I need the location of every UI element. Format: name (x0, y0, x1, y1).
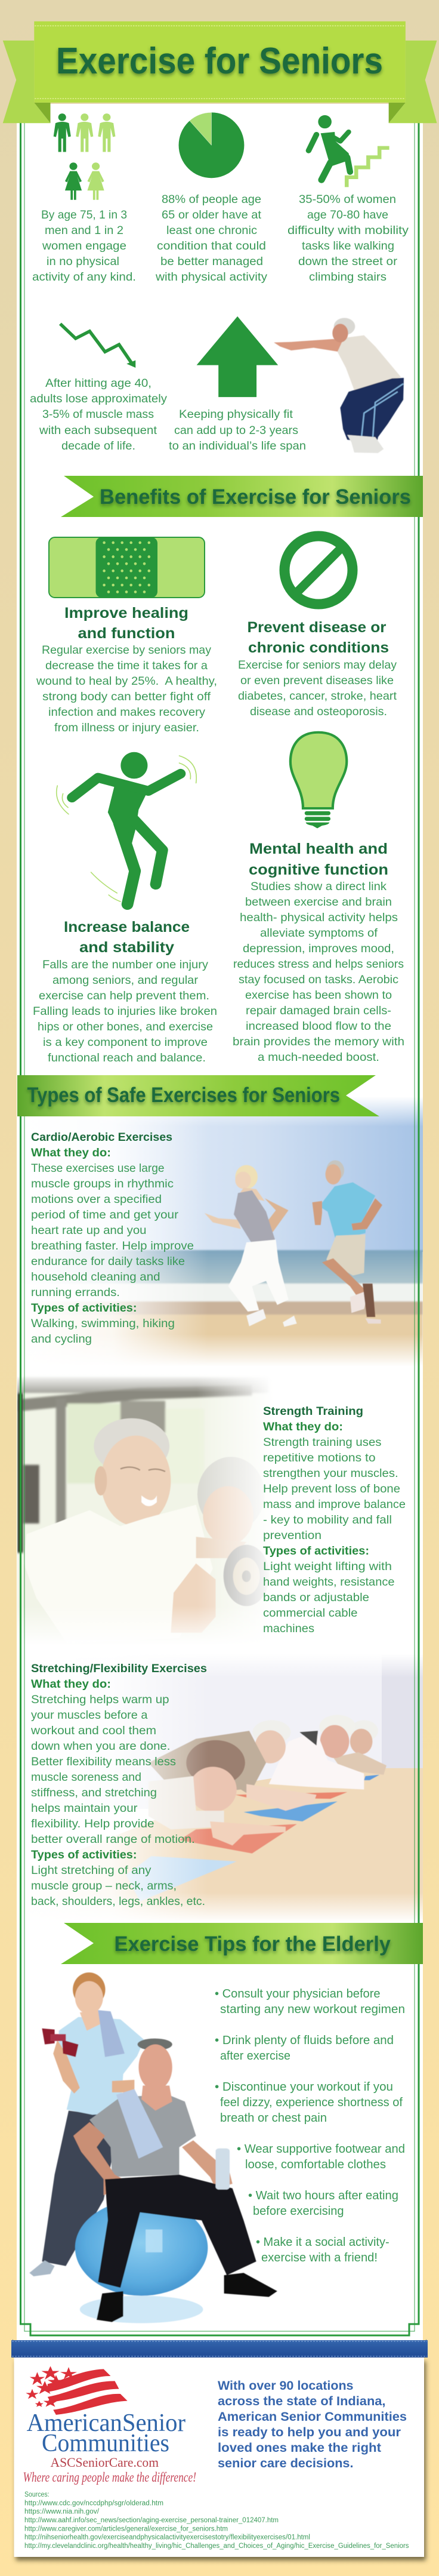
text: strength training: prevention (263, 1529, 321, 1542)
sources list: http://www.caregiver.com/articles/general/exercise_for_seniors.htm (24, 2525, 228, 2532)
benefit: mental health and cognitive function: increased blood flow to the (246, 1020, 391, 1033)
logo: American Senior Communities: ASCSeniorCare.com (50, 2455, 159, 2470)
person two (253, 1721, 290, 1740)
stat: inactivity by age 75: men and 1 in 2 (45, 224, 123, 237)
stat: muscle mass loss after 40: adults lose approximately (30, 392, 167, 405)
photo: senior couple with exercise ball (29, 1972, 277, 2323)
callout: 90 locations: loved ones make the right (218, 2441, 381, 2455)
text: cardio aerobic exercises: household cleaning and (31, 1270, 160, 1284)
exercise tips list: • Wait two hours after eating (248, 2189, 398, 2202)
sources list: Sources: (24, 2491, 50, 2498)
icon: prohibition sign (285, 536, 353, 604)
banner: benefits of exercise (61, 476, 423, 517)
text: stretching and flexibility: flexibility. Help provide (31, 1817, 154, 1830)
text: strength training: What they do: (263, 1420, 343, 1433)
icon: person climbing stairs (308, 115, 389, 187)
text: strength training: Help prevent loss of bone (263, 1482, 400, 1495)
text: cardio aerobic exercises: heart rate up and you (31, 1224, 147, 1237)
benefit: mental health and cognitive function: between exercise and brain (245, 895, 392, 909)
sources list (24, 2491, 409, 2550)
benefit: improve healing and function (36, 605, 217, 734)
text: strength training: bands or adjustable (263, 1591, 369, 1604)
exercise mats (179, 1824, 297, 1854)
text: cardio aerobic exercises: Walking, swimming, hiking (31, 1317, 175, 1330)
ribbon tails (3, 41, 437, 123)
title ribbon (3, 21, 437, 123)
callout: 90 locations: across the state of Indiana, (218, 2395, 385, 2408)
text: stretching and flexibility: stiffness, and stretching (31, 1786, 157, 1799)
benefit: improve healing and function: decrease the time it takes for a (45, 659, 208, 672)
icon: declining trend arrow (60, 324, 135, 368)
photo: older man squatting (274, 318, 404, 453)
stat: chronic conditions 88 percent: 88% of people age (162, 193, 261, 206)
benefit: increase balance and stability: is a key component to improve (43, 1036, 208, 1049)
benefit: improve healing and function: strong body can better fight off (42, 690, 211, 703)
text: strength training (263, 1405, 406, 1635)
photo: couple in the gym (17, 1374, 274, 1645)
exercise tips list: breath or chest pain (220, 2111, 327, 2125)
text: cardio aerobic exercises: running errands. (31, 1286, 120, 1299)
stat: mobility difficulty in women: age 70-80 have (307, 208, 388, 221)
sources list: https://www.nia.nih.gov/ (24, 2509, 100, 2516)
benefit: improve healing and function: infection and makes recovery (48, 706, 205, 719)
callout: 90 locations: is ready to help you and your (218, 2426, 401, 2439)
text: strength training: - key to mobility and fall (263, 1513, 392, 1526)
man jogger (312, 1160, 382, 1324)
icon: three men, one highlighted (54, 113, 115, 152)
benefit: increase balance and stability: Increase balance (64, 919, 190, 935)
photo: seniors stretching on mats (92, 1660, 423, 1919)
text: stretching and flexibility: your muscles before a (31, 1709, 148, 1722)
sources list: http://nihseniorhealth.gov/exerciseandphysicalactivityexercisestotry/flexibilityexercises/01.html (24, 2534, 310, 2541)
banner: exercise tips for the elderly (61, 1923, 423, 1964)
stat: chronic conditions 88 percent: be better managed (160, 255, 263, 268)
benefit: improve healing and function: wound to heal by 25%. A healthy, (36, 675, 217, 688)
benefit: mental health and cognitive function: health- physical activity helps (240, 911, 398, 924)
person four (350, 1720, 378, 1741)
benefit: increase balance and stability: among seniors, and regular (52, 974, 199, 987)
exercise tips list: • Consult your physician before (215, 1987, 381, 2001)
benefit: improve healing and function: from illness or injury easier. (54, 721, 199, 734)
callout: 90 locations: American Senior Communities (218, 2410, 407, 2424)
benefit: increase balance and stability: Falling leads to injuries like broken (33, 1005, 217, 1018)
benefit: mental health and cognitive function: depression, improves mood, (243, 942, 394, 955)
person one (186, 1740, 246, 1780)
banner: benefits of exercise: Benefits of Exercise for Seniors (100, 485, 411, 509)
stat: mobility difficulty in women: climbing stairs (309, 270, 387, 284)
text: strength training: commercial cable (263, 1606, 358, 1620)
older woman (197, 1457, 265, 1531)
stat: muscle mass loss after 40 (30, 377, 167, 453)
text: stretching and flexibility: Light stretching of any (31, 1864, 152, 1877)
person three (320, 1715, 354, 1736)
benefit: mental health and cognitive function: alleviate symptoms of (260, 927, 378, 940)
text: stretching and flexibility: better overall range of motion. (31, 1833, 195, 1846)
text: stretching and flexibility: helps maintain your (31, 1802, 138, 1815)
text: strength training: Strength Training (263, 1405, 363, 1418)
benefit: increase balance and stability: and stability (79, 939, 174, 956)
stat: chronic conditions 88 percent: condition that could (157, 239, 266, 253)
stat: chronic conditions 88 percent: 65 or older have at (162, 208, 262, 221)
text: stretching and flexibility: Better flexibility means less (31, 1755, 176, 1768)
stat: mobility difficulty in women: down the street or (298, 255, 398, 268)
sources list: http://www.aahf.info/sec_news/section/aging-exercise_personal-trainer_012407.htm (24, 2517, 279, 2524)
logo: American Senior Communities (23, 2366, 196, 2485)
benefit: prevent disease or chronic conditions (238, 619, 397, 718)
benefit: mental health and cognitive function: stay focused on tasks. Aerobic (239, 973, 398, 986)
exercise tips list: before exercising (253, 2204, 344, 2218)
text: stretching and flexibility: muscle group – neck, arms, (31, 1879, 177, 1892)
sources list: http://www.cdc.gov/nccdphp/sgr/olderad.htm (24, 2500, 163, 2507)
exercise tips list: starting any new workout regimen (220, 2002, 405, 2016)
logo: American Senior Communities: Communities (42, 2430, 169, 2457)
sources list: http://my.clevelandclinic.org/health/healthy_living/hic_Challenges_and_Choices_of_Aging/hic_Exercise_Guidelines_for_Seniors (24, 2543, 409, 2550)
title: Exercise for Seniors (56, 41, 383, 82)
text: cardio aerobic exercises: motions over a specified (31, 1193, 162, 1206)
text: strength training: Light weight lifting with (263, 1560, 392, 1573)
text: strength training: Types of activities: (263, 1544, 369, 1558)
logo wordmark: AmericanSenior (27, 2409, 186, 2437)
icon: light bulb (290, 733, 347, 828)
text: stretching and flexibility (30, 1662, 207, 1908)
standing woman (29, 1972, 144, 2276)
dumbbell (224, 1545, 270, 1606)
stat: added life span (169, 408, 306, 453)
footer card (11, 2339, 428, 2557)
text: strength training: repetitive motions to (263, 1451, 376, 1464)
benefit: prevent disease or chronic conditions: chronic conditions (248, 639, 389, 656)
benefit: improve healing and function: and function (78, 625, 175, 642)
text: cardio aerobic exercises: Cardio/Aerobic Exercises (31, 1131, 172, 1144)
stat: mobility difficulty in women (287, 193, 409, 284)
exercise tips list: loose, comfortable clothes (245, 2158, 386, 2171)
benefit: improve healing and function: Improve healing (64, 605, 188, 621)
exercise tips list: • Drink plenty of fluids before and (215, 2033, 394, 2047)
text: cardio aerobic exercises: breathing faster. Help improve (31, 1239, 194, 1252)
text: strength training: Strength training uses (263, 1436, 382, 1449)
benefit: increase balance and stability: hips or other bones, and exercise (38, 1020, 213, 1033)
benefit: mental health and cognitive function: a much-needed boost. (258, 1051, 379, 1064)
exercise tips list: • Discontinue your workout if you (215, 2080, 393, 2094)
stat: mobility difficulty in women: tasks like walking (302, 239, 394, 253)
stat: muscle mass loss after 40: with each subsequent (39, 424, 157, 437)
benefit: prevent disease or chronic conditions: Prevent disease or (247, 619, 387, 636)
icons row one (54, 112, 404, 453)
text: stretching and flexibility: Types of activities: (31, 1848, 137, 1861)
logo: American Senior Communities: Where caring people make the difference! (23, 2470, 196, 2485)
exercise tips list: • Make it a social activity- (256, 2235, 389, 2249)
ball reflection (80, 2296, 203, 2323)
benefit: improve healing and function: Regular exercise by seniors may (42, 644, 211, 657)
stat: mobility difficulty in women: difficulty with mobility (287, 224, 409, 237)
text: stretching and flexibility: workout and cool them (30, 1724, 156, 1737)
stat: muscle mass loss after 40: After hitting age 40, (45, 377, 152, 390)
icon: bandage (49, 537, 205, 598)
benefit: mental health and cognitive function: exercise has been shown to (245, 989, 392, 1002)
stat: mobility difficulty in women: 35-50% of women (299, 193, 396, 206)
text: stretching and flexibility: down when you are done. (31, 1740, 170, 1753)
text: stretching and flexibility: Stretching/Flexibility Exercises (31, 1662, 207, 1675)
callout: 90 locations: senior care decisions. (218, 2457, 353, 2470)
text: cardio aerobic exercises: and cycling (31, 1332, 92, 1346)
text: stretching and flexibility: Stretching helps warm up (31, 1693, 169, 1706)
text: cardio aerobic exercises: endurance for daily tasks like (31, 1255, 185, 1268)
text: stretching and flexibility: back, shoulders, legs, ankles, etc. (31, 1895, 205, 1908)
stat: inactivity by age 75: By age 75, 1 in 3 (41, 208, 127, 221)
exercise tips list: feel dizzy, experience shortness of (220, 2095, 403, 2109)
seated man (73, 2039, 277, 2322)
benefit: increase balance and stability (33, 919, 217, 1064)
decorative green frame (20, 119, 419, 2335)
text: strength training: mass and improve balance (263, 1498, 406, 1511)
benefit: increase balance and stability: exercise can help prevent them. (39, 989, 209, 1002)
benefit: mental health and cognitive function: reduces stress and helps seniors (233, 958, 404, 971)
icon: off-balance figure (57, 752, 196, 904)
text: strength training: hand weights, resistance (263, 1575, 395, 1589)
stat: inactivity by age 75: women engage (42, 239, 126, 253)
text: cardio aerobic exercises: These exercises use large (31, 1162, 165, 1175)
stat: inactivity by age 75: activity of any kind. (32, 270, 136, 284)
stat: added life span: Keeping physically fit (179, 408, 293, 421)
benefit: mental health and cognitive function: brain provides the memory with (233, 1035, 404, 1048)
stat: inactivity by age 75: in no physical (47, 255, 119, 268)
text: stretching and flexibility: What they do: (31, 1678, 111, 1691)
blue band (11, 2339, 428, 2358)
banner: exercise tips for the elderly: Exercise Tips for the Elderly (115, 1932, 391, 1956)
stat: chronic conditions 88 percent (155, 193, 267, 284)
stat: added life span: can add up to 2-3 years (174, 424, 298, 437)
stat: added life span: to an individual’s life span (169, 439, 306, 453)
logo flag (26, 2366, 128, 2415)
stat: inactivity by age 75 (32, 208, 136, 284)
text: cardio aerobic exercises (31, 1131, 194, 1346)
benefit: prevent disease or chronic conditions: or even prevent diseases like (240, 674, 394, 687)
text: cardio aerobic exercises: What they do: (31, 1146, 111, 1159)
text: cardio aerobic exercises: Types of activities: (31, 1301, 137, 1315)
callout: 90 locations (218, 2379, 407, 2470)
benefit: increase balance and stability: Falls are the number one injury (42, 958, 208, 971)
text: cardio aerobic exercises: period of time and get your (31, 1208, 179, 1221)
woman jogger (205, 1165, 297, 1327)
older man, head and shirt (94, 1418, 169, 1464)
benefit: mental health and cognitive function: Mental health and (249, 841, 388, 857)
benefit: mental health and cognitive function (233, 841, 404, 1064)
exercise tips list: • Wear supportive footwear and (237, 2142, 405, 2156)
icon: two women, one highlighted (65, 162, 104, 200)
photo: seniors jogging on a beach (58, 1100, 423, 1364)
benefit: increase balance and stability: functional reach and balance. (48, 1051, 206, 1064)
benefit: mental health and cognitive function: cognitive function (249, 861, 388, 878)
text: strength training: machines (263, 1622, 314, 1635)
stat: muscle mass loss after 40: 3-5% of muscle mass (42, 408, 154, 421)
banner: types of safe exercises: Types of Safe Exercises for Seniors (27, 1084, 340, 1107)
callout: 90 locations: With over 90 locations (218, 2379, 353, 2393)
exercise tips list (215, 1987, 405, 2264)
icon: pie chart 88 percent (179, 112, 244, 178)
icon: large up arrow (197, 316, 278, 397)
benefit: prevent disease or chronic conditions: Exercise for seniors may delay (238, 658, 397, 672)
benefit: mental health and cognitive function: Studies show a direct link (251, 880, 387, 893)
benefit: prevent disease or chronic conditions: disease and osteoporosis. (250, 705, 387, 718)
stat: chronic conditions 88 percent: with physical activity (155, 270, 267, 284)
exercise tips list: after exercise (220, 2049, 290, 2063)
text: strength training: strengthen your muscles. (263, 1467, 398, 1480)
stat: chronic conditions 88 percent: least one chronic (166, 224, 257, 237)
text: cardio aerobic exercises: muscle groups in rhythmic (31, 1177, 174, 1190)
exercise tips list: exercise with a friend! (261, 2251, 378, 2264)
text: stretching and flexibility: muscle soreness and (31, 1771, 141, 1784)
stat: muscle mass loss after 40: decade of life. (61, 439, 135, 453)
banner: types of safe exercises (17, 1075, 379, 1116)
benefit: prevent disease or chronic conditions: diabetes, cancer, stroke, heart (238, 690, 397, 703)
benefit: mental health and cognitive function: repair damaged brain cells- (246, 1004, 391, 1017)
